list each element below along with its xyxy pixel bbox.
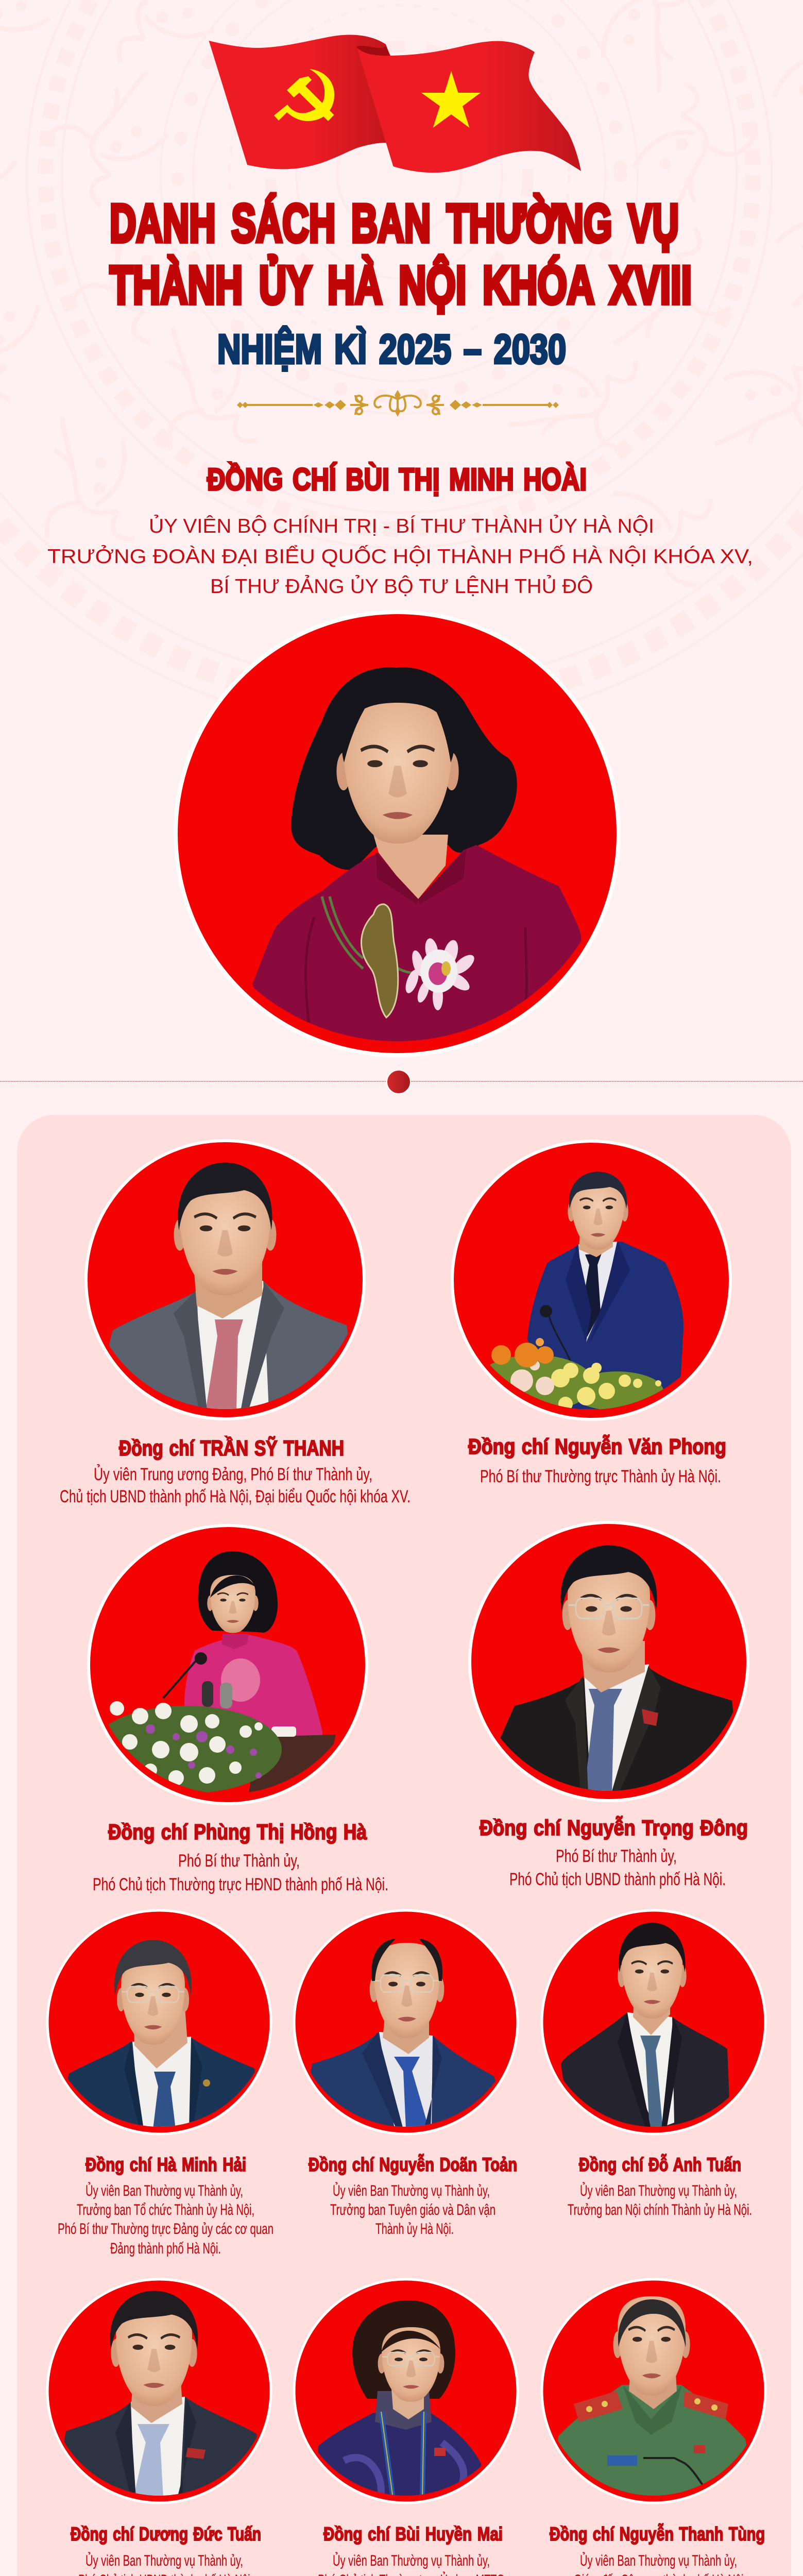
leader name: ĐỒNG CHÍ BÙI THỊ MINH HOÀI [207, 462, 587, 497]
title [110, 194, 692, 315]
name: Bùi Huyền Mai: Đồng chí Bùi Huyền Mai [323, 2523, 503, 2545]
section divider with bead [0, 1070, 803, 1094]
background drum pattern [0, 0, 803, 729]
ornament divider [237, 390, 559, 417]
name: Nguyễn Doãn Toản: Đồng chí Nguyễn Doãn Toản [309, 2154, 517, 2175]
name: Nguyễn Văn Phong: Đồng chí Nguyễn Văn Phong [468, 1434, 726, 1459]
portrait: Đỗ Anh Tuấn [542, 1910, 765, 2136]
subtitle: term: NHIỆM KÌ 2025 – 2030 [217, 326, 566, 372]
name: Nguyễn Thanh Tùng [550, 2523, 765, 2576]
name: Trần Sỹ Thanh: Đồng chí TRẦN SỸ THANH [119, 1436, 344, 1460]
name: Hà Minh Hải: Đảng thành phố Hà Nội. [110, 2240, 221, 2257]
icon: party and national flags [209, 35, 581, 173]
portrait: Bùi Thị Minh Hoài [176, 612, 619, 1056]
portrait: Hà Minh Hải [47, 1910, 271, 2136]
name: Nguyễn Trọng Đông: Phó Chủ tịch UBND thành phố Hà Nội. [509, 1870, 726, 1889]
name: Nguyễn Doãn Toản: Trưởng ban Tuyên giáo và Dân vận [330, 2201, 496, 2218]
name: Trần Sỹ Thanh [60, 1436, 411, 1506]
leader titles: ỦY VIÊN BỘ CHÍNH TRỊ - BÍ THƯ THÀNH ỦY HÀ NỘI [149, 515, 654, 537]
name: Nguyễn Trọng Đông [480, 1815, 748, 1889]
name: Bùi Huyền Mai [318, 2523, 505, 2576]
name: Nguyễn Doãn Toản [309, 2154, 517, 2238]
name: Phùng Thị Hồng Hà: Đồng chí Phùng Thị Hồng Hà [108, 1820, 367, 1844]
portrait: Dương Đức Tuấn [47, 2279, 271, 2504]
portrait: Nguyễn Văn Phong [452, 1141, 730, 1419]
leader titles: TRƯỞNG ĐOÀN ĐẠI BIỂU QUỐC HỘI THÀNH PHỐ HÀ NỘI KHÓA XV, [47, 545, 753, 568]
name: Nguyễn Doãn Toản: Thành ủy Hà Nội. [375, 2221, 454, 2238]
name: Dương Đức Tuấn: Ủy viên Ban Thường vụ Thành ủy, [86, 2552, 243, 2569]
name: Hà Minh Hải: Đồng chí Hà Minh Hải [86, 2154, 246, 2175]
portrait: Phùng Thị Hồng Hà [89, 1526, 367, 1804]
leader titles: BÍ THƯ ĐẢNG ỦY BỘ TƯ LỆNH THỦ ĐÔ [210, 575, 593, 598]
portrait: Nguyễn Trọng Đông [470, 1522, 748, 1801]
portrait: Bùi Huyền Mai [294, 2279, 518, 2504]
panel: members [17, 1115, 791, 2576]
name: Hà Minh Hải: Phó Bí thư Thường trực Đảng ủy các cơ quan [58, 2221, 274, 2238]
name: Đỗ Anh Tuấn [568, 2154, 752, 2218]
name: Đỗ Anh Tuấn: Đồng chí Đỗ Anh Tuấn [579, 2154, 741, 2175]
name: Phùng Thị Hồng Hà: Phó Chủ tịch Thường trực HĐND thành phố Hà Nội. [93, 1875, 388, 1894]
name: Dương Đức Tuấn [71, 2523, 261, 2576]
leader titles [47, 515, 753, 598]
name: Phùng Thị Hồng Hà [93, 1820, 388, 1894]
name: Dương Đức Tuấn: Đồng chí Dương Đức Tuấn [71, 2523, 261, 2545]
portrait: Nguyễn Doãn Toản [294, 1910, 518, 2136]
name: Nguyễn Văn Phong: Phó Bí thư Thường trực Thành ủy Hà Nội. [480, 1467, 721, 1486]
name: Hà Minh Hải: Ủy viên Ban Thường vụ Thành ủy, [86, 2182, 243, 2199]
name: Nguyễn Trọng Đông: Đồng chí Nguyễn Trọng Đông [480, 1815, 748, 1840]
portrait: Trần Sỹ Thanh [86, 1141, 364, 1419]
name: Hà Minh Hải [58, 2154, 274, 2257]
name: Nguyễn Trọng Đông: Phó Bí thư Thành ủy, [556, 1846, 677, 1866]
portrait: Nguyễn Thanh Tùng [542, 2279, 765, 2504]
name: Phùng Thị Hồng Hà: Phó Bí thư Thành ủy, [178, 1851, 300, 1871]
name: Hà Minh Hải: Trưởng ban Tổ chức Thành ủy Hà Nội, [77, 2201, 254, 2218]
name: Trần Sỹ Thanh: Ủy viên Trung ương Đảng, Phó Bí thư Thành ủy, [94, 1465, 372, 1484]
name: Nguyễn Doãn Toản: Ủy viên Ban Thường vụ Thành ủy, [333, 2182, 490, 2199]
name: Bùi Huyền Mai: Ủy viên Ban Thường vụ Thành ủy, [333, 2552, 490, 2569]
name: Nguyễn Văn Phong [468, 1434, 726, 1486]
name: Trần Sỹ Thanh: Chủ tịch UBND thành phố Hà Nội, Đại biểu Quốc hội khóa XV. [60, 1487, 411, 1506]
